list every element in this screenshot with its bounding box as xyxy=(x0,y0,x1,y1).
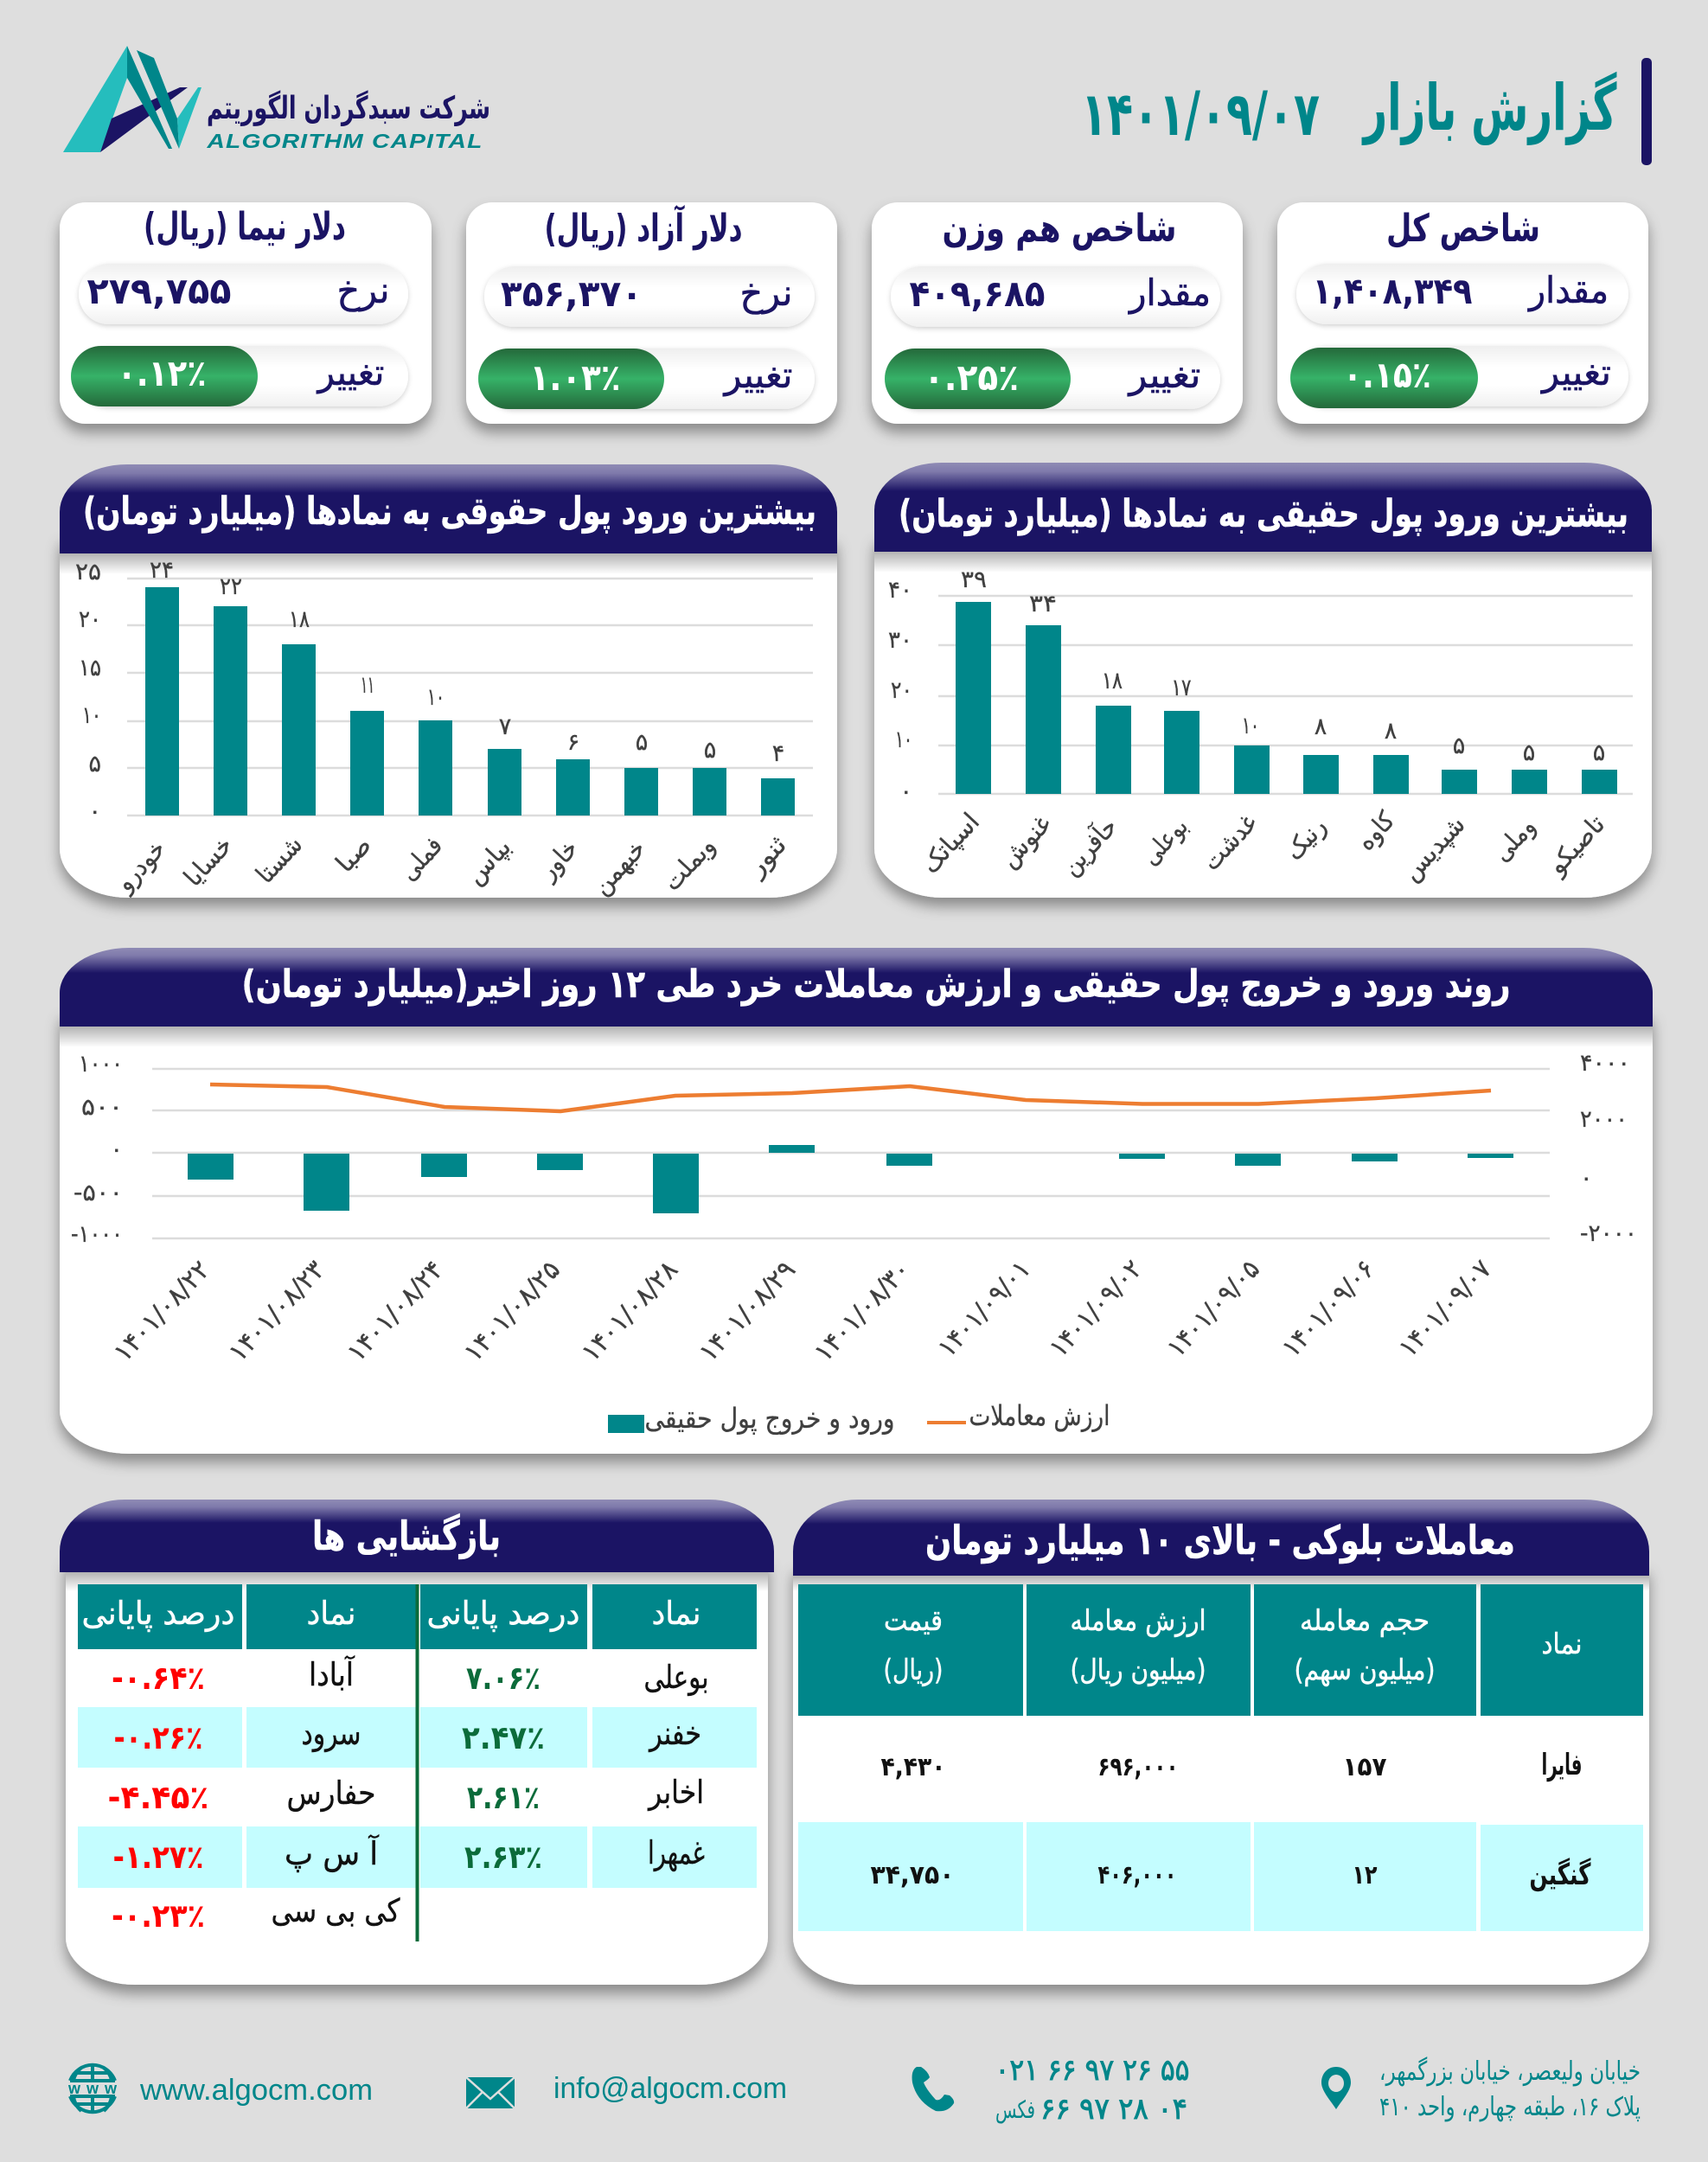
card: free dollar: تغییر xyxy=(723,354,792,396)
symbol labels: legal inflow: خودرو xyxy=(109,834,171,898)
logo: ALGORITHM CAPITAL xyxy=(206,130,483,152)
symbol labels: real inflow: شپدیس xyxy=(1396,809,1471,887)
icon: globe: www xyxy=(67,2080,118,2097)
axis labels: trend: ۲۰۰۰ xyxy=(1580,1106,1628,1133)
card: nima dollar xyxy=(60,202,432,424)
axis labels: real inflow: ۳۹ xyxy=(961,566,987,593)
logo xyxy=(63,46,490,152)
card: equal weight index: ۴۰۹,۶۸۵ xyxy=(910,272,1045,315)
symbol labels: real inflow: اسپاتک xyxy=(915,807,986,880)
table rows: ۶۹۶,۰۰۰ xyxy=(1098,1752,1178,1782)
symbol labels: real inflow: وملی xyxy=(1487,812,1541,867)
table rows: ۲.۴۷٪ xyxy=(462,1719,545,1756)
axis labels: trend: -۱۰۰۰ xyxy=(71,1221,123,1248)
axis labels: trend xyxy=(71,1050,1637,1248)
axis labels: trend: ۵۰۰ xyxy=(81,1094,123,1121)
table rows: آ س پ xyxy=(285,1834,380,1872)
table rows xyxy=(78,1655,757,1935)
symbol labels: real inflow: بوعلی xyxy=(1135,811,1193,871)
axis labels: legal inflow: ۵ xyxy=(636,729,648,756)
panel: 12-day trend: روند ورود و خروج پول حقیقی و ارزش معاملات خرد طی ۱۲ روز اخیر(میلیارد تومان) xyxy=(242,963,1510,1007)
axis labels: legal inflow: ۲۰ xyxy=(79,606,101,633)
email: info@algocm.com xyxy=(553,2072,787,2105)
axis labels: real inflow: ۵ xyxy=(1453,732,1465,759)
table rows: -۴.۴۵٪ xyxy=(107,1779,209,1816)
axis labels: legal inflow: ۱۵ xyxy=(79,655,101,681)
axis labels: real inflow: ۸ xyxy=(1315,713,1327,740)
table rows: فایرا xyxy=(1541,1748,1583,1782)
card: total index: تغییر xyxy=(1540,351,1611,393)
panel: top real money inflow xyxy=(874,463,1652,898)
table rows: اخابر xyxy=(647,1774,704,1811)
axis labels: legal inflow: ۲۲ xyxy=(220,573,242,600)
card: total index: شاخص کل xyxy=(1386,207,1540,251)
date labels: trend xyxy=(108,1254,1498,1368)
legend: ورود و خروج پول حقیقی xyxy=(645,1402,894,1435)
table rows: -۰.۲۳٪ xyxy=(112,1897,205,1935)
line: trade value xyxy=(210,1084,1491,1111)
axis labels: real inflow: ۳۴ xyxy=(1029,591,1057,617)
axis labels: trend: ۰ xyxy=(110,1136,123,1163)
legend: ارزش معاملات xyxy=(969,1399,1110,1432)
table rows: ۲.۶۱٪ xyxy=(467,1779,540,1816)
logo: شرکت سبدگردان الگوریتم xyxy=(207,90,490,126)
symbol labels: real inflow: غنوش xyxy=(994,809,1057,873)
icon: envelope xyxy=(466,2077,515,2108)
legend xyxy=(608,1399,1110,1435)
card: free dollar: ۱.۰۳٪ xyxy=(529,356,621,399)
card: total index xyxy=(1277,202,1648,424)
axis labels: real inflow xyxy=(888,566,1605,805)
axis labels: legal inflow: ۲۵ xyxy=(75,559,101,585)
card: total index: مقدار xyxy=(1527,269,1609,311)
axis labels: real inflow: ۵ xyxy=(1593,739,1605,766)
date labels: trend: ۱۴۰۱/۰۸/۲۸ xyxy=(576,1255,684,1368)
table header: نماد xyxy=(652,1595,700,1632)
table header: قیمت xyxy=(884,1603,943,1637)
date labels: trend: ۱۴۰۱/۰۸/۲۹ xyxy=(694,1255,802,1368)
date labels: trend: ۱۴۰۱/۰۹/۰۲ xyxy=(1044,1254,1148,1363)
symbol labels: real inflow: تاصیکو xyxy=(1540,809,1610,881)
website: www.algocm.com xyxy=(139,2074,373,2107)
date labels: trend: ۱۴۰۱/۰۹/۰۶ xyxy=(1276,1254,1381,1363)
table rows: کی بی سی xyxy=(272,1892,400,1929)
symbol labels: real inflow: کاوه xyxy=(1351,805,1400,856)
axis labels: real inflow: ۸ xyxy=(1385,718,1397,745)
table rows: حفارس xyxy=(287,1775,375,1812)
card: nima dollar: ۰.۱۲٪ xyxy=(118,352,206,394)
table header: (میلیون ریال) xyxy=(1071,1653,1206,1686)
icon: phone xyxy=(912,2067,954,2111)
card: equal weight index: مقدار xyxy=(1128,272,1211,314)
symbol labels: legal inflow: ثنور xyxy=(740,830,792,883)
axis labels: real inflow: ۴۰ xyxy=(888,577,912,604)
date labels: trend: ۱۴۰۱/۰۹/۰۱ xyxy=(932,1254,1037,1363)
panel: top legal money inflow xyxy=(60,464,837,900)
axis labels: trend: ۴۰۰۰ xyxy=(1580,1050,1630,1077)
report title xyxy=(1081,58,1652,165)
bars: net real money xyxy=(188,1145,1513,1213)
card: nima dollar: تغییر xyxy=(317,351,384,393)
table header: نماد xyxy=(306,1595,356,1632)
table header: (ریال) xyxy=(884,1653,943,1686)
axis labels: real inflow: ۰ xyxy=(899,778,912,805)
axis labels: trend: ۱۰۰۰ xyxy=(79,1051,123,1078)
table rows: ۳۴,۷۵۰ xyxy=(870,1860,955,1890)
card: free dollar: دلار آزاد (ریال) xyxy=(545,204,742,251)
axis labels: real inflow: ۵ xyxy=(1523,739,1535,766)
axis labels: legal inflow: ۵ xyxy=(704,737,716,764)
icon: globe xyxy=(67,2065,118,2114)
date labels: trend: ۱۴۰۱/۰۸/۳۰ xyxy=(809,1255,917,1368)
table rows: -۰.۲۶٪ xyxy=(114,1719,202,1756)
symbol labels: legal inflow: بپاس xyxy=(460,832,517,891)
table rows: غمهرا xyxy=(648,1834,705,1871)
card: equal weight index: تغییر xyxy=(1127,354,1200,396)
panel: top legal money inflow: بیشترین ورود پول حقوقی به نمادها (میلیارد تومان) xyxy=(83,489,816,534)
axis labels: legal inflow: ۵ xyxy=(88,751,101,777)
card: free dollar: ۳۵۶,۳۷۰ xyxy=(501,272,643,315)
card: nima dollar: ۲۷۹,۷۵۵ xyxy=(86,270,232,312)
table header: (میلیون سهم) xyxy=(1294,1653,1436,1686)
axis labels: real inflow: ۱۸ xyxy=(1102,668,1123,694)
axis labels: real inflow: ۱۰ xyxy=(895,726,912,753)
bars: real inflow xyxy=(956,602,1617,794)
axis labels: legal inflow: ۷ xyxy=(499,713,511,740)
table header xyxy=(798,1584,1643,1716)
symbol labels: legal inflow xyxy=(109,829,792,900)
table rows: ۱۲ xyxy=(1353,1860,1377,1890)
phone numbers: فکس xyxy=(995,2095,1035,2124)
axis labels: legal inflow xyxy=(75,557,784,825)
table rows: سرود xyxy=(301,1715,361,1752)
axis labels: legal inflow: ۴ xyxy=(772,740,784,767)
axis labels: trend: -۵۰۰ xyxy=(74,1180,123,1206)
phone numbers: ۰۲۱ ۶۶ ۹۷ ۲۶ ۵۵ xyxy=(995,2053,1190,2088)
table header: نماد xyxy=(1541,1627,1583,1660)
symbol labels: legal inflow: صبا xyxy=(329,830,377,878)
card: nima dollar: دلار نیما (ریال) xyxy=(144,205,346,249)
address: پلاک ۱۶، طبقه چهارم، واحد ۴۱۰ xyxy=(1379,2092,1641,2122)
date labels: trend: ۱۴۰۱/۰۸/۲۲ xyxy=(108,1255,216,1368)
panel: block trades table: معاملات بلوکی - بالای ۱۰ میلیارد تومان xyxy=(925,1517,1515,1564)
table header: ارزش معامله xyxy=(1071,1603,1206,1637)
axis labels: real inflow: ۱۷ xyxy=(1171,675,1192,701)
panel: 12-day trend xyxy=(60,948,1653,1454)
date labels: trend: ۱۴۰۱/۰۹/۰۷ xyxy=(1393,1254,1498,1363)
card: equal weight index xyxy=(872,202,1243,424)
table rows: خفنر xyxy=(648,1715,701,1752)
date labels: trend: ۱۴۰۱/۰۹/۰۵ xyxy=(1161,1254,1266,1363)
axis labels: real inflow: ۲۰ xyxy=(891,677,912,704)
table rows: گنگین xyxy=(1529,1858,1591,1892)
card: nima dollar: نرخ xyxy=(337,269,389,311)
symbol labels: legal inflow: خاور xyxy=(532,834,584,886)
axis labels: legal inflow: ۶ xyxy=(567,729,579,756)
panel: block trades table xyxy=(793,1500,1649,1985)
table rows: -۱.۲۷٪ xyxy=(112,1839,204,1876)
report title: ۱۴۰۱/۰۹/۰۷ xyxy=(1081,79,1320,150)
table rows: ۴,۴۳۰ xyxy=(880,1752,946,1782)
date labels: trend: ۱۴۰۱/۰۸/۲۴ xyxy=(342,1255,450,1368)
axis labels: legal inflow: ۱۰ xyxy=(82,702,101,729)
date labels: trend: ۱۴۰۱/۰۸/۲۵ xyxy=(458,1255,566,1368)
card: total index: ۱,۴۰۸,۳۴۹ xyxy=(1313,270,1472,312)
table header xyxy=(78,1584,757,1649)
axis labels: legal inflow: ۱۸ xyxy=(289,606,310,633)
table header: درصد پایانی xyxy=(427,1595,579,1632)
table rows: ۱۵۷ xyxy=(1342,1752,1387,1782)
symbol labels: real inflow: غدشت xyxy=(1196,808,1263,876)
symbol labels: legal inflow: خسایا xyxy=(178,830,238,892)
axis labels: legal inflow: ۱۰ xyxy=(427,684,445,711)
axis labels: trend: ۰ xyxy=(1580,1165,1593,1192)
symbol labels: real inflow: حآفرین xyxy=(1055,811,1123,881)
axis labels: legal inflow: ۰ xyxy=(88,798,101,825)
table rows: -۰.۶۴٪ xyxy=(112,1660,205,1697)
panel: openings table: بازگشایی ها xyxy=(312,1513,501,1559)
axis labels: real inflow: ۳۰ xyxy=(888,627,912,654)
symbol labels: real inflow xyxy=(915,805,1610,887)
symbol labels: legal inflow: وبملت xyxy=(657,831,721,897)
card: equal weight index: شاخص هم وزن xyxy=(943,207,1176,251)
card: total index: ۰.۱۵٪ xyxy=(1343,354,1431,396)
symbol labels: real inflow: رنیک xyxy=(1279,811,1332,866)
table rows: ۲.۶۳٪ xyxy=(464,1839,542,1876)
card: free dollar: نرخ xyxy=(740,272,792,314)
bars: legal inflow xyxy=(145,587,795,816)
table rows: ۷.۰۶٪ xyxy=(466,1660,541,1697)
date labels: trend: ۱۴۰۱/۰۸/۲۳ xyxy=(223,1255,331,1368)
card: free dollar xyxy=(466,202,837,424)
card: equal weight index: ۰.۲۵٪ xyxy=(924,356,1019,399)
symbol labels: legal inflow: خبهمن xyxy=(586,834,651,900)
address xyxy=(1379,2056,1641,2122)
symbol labels: legal inflow: فملی xyxy=(393,831,448,886)
axis labels: legal inflow: ۱۱ xyxy=(361,672,374,699)
table header: حجم معامله xyxy=(1300,1603,1430,1637)
panel: openings table xyxy=(60,1500,774,1985)
address: خیابان ولیعصر، خیابان بزرگمهر، xyxy=(1379,2056,1641,2087)
table rows: آبادا xyxy=(309,1655,355,1693)
icon: location pin xyxy=(1321,2067,1351,2109)
table rows xyxy=(798,1748,1643,1931)
table rows: ۴۰۶,۰۰۰ xyxy=(1098,1860,1176,1890)
axis labels: trend: -۲۰۰۰ xyxy=(1580,1220,1637,1247)
table header: درصد پایانی xyxy=(81,1595,235,1632)
table rows: بوعلی xyxy=(643,1659,709,1696)
axis labels: real inflow: ۱۰ xyxy=(1242,713,1259,739)
symbol labels: legal inflow: شستا xyxy=(250,829,308,889)
phone numbers: ۶۶ ۹۷ ۲۸ ۰۴ xyxy=(1040,2092,1187,2127)
axis labels: legal inflow: ۲۴ xyxy=(150,557,174,584)
phone numbers xyxy=(995,2053,1190,2127)
